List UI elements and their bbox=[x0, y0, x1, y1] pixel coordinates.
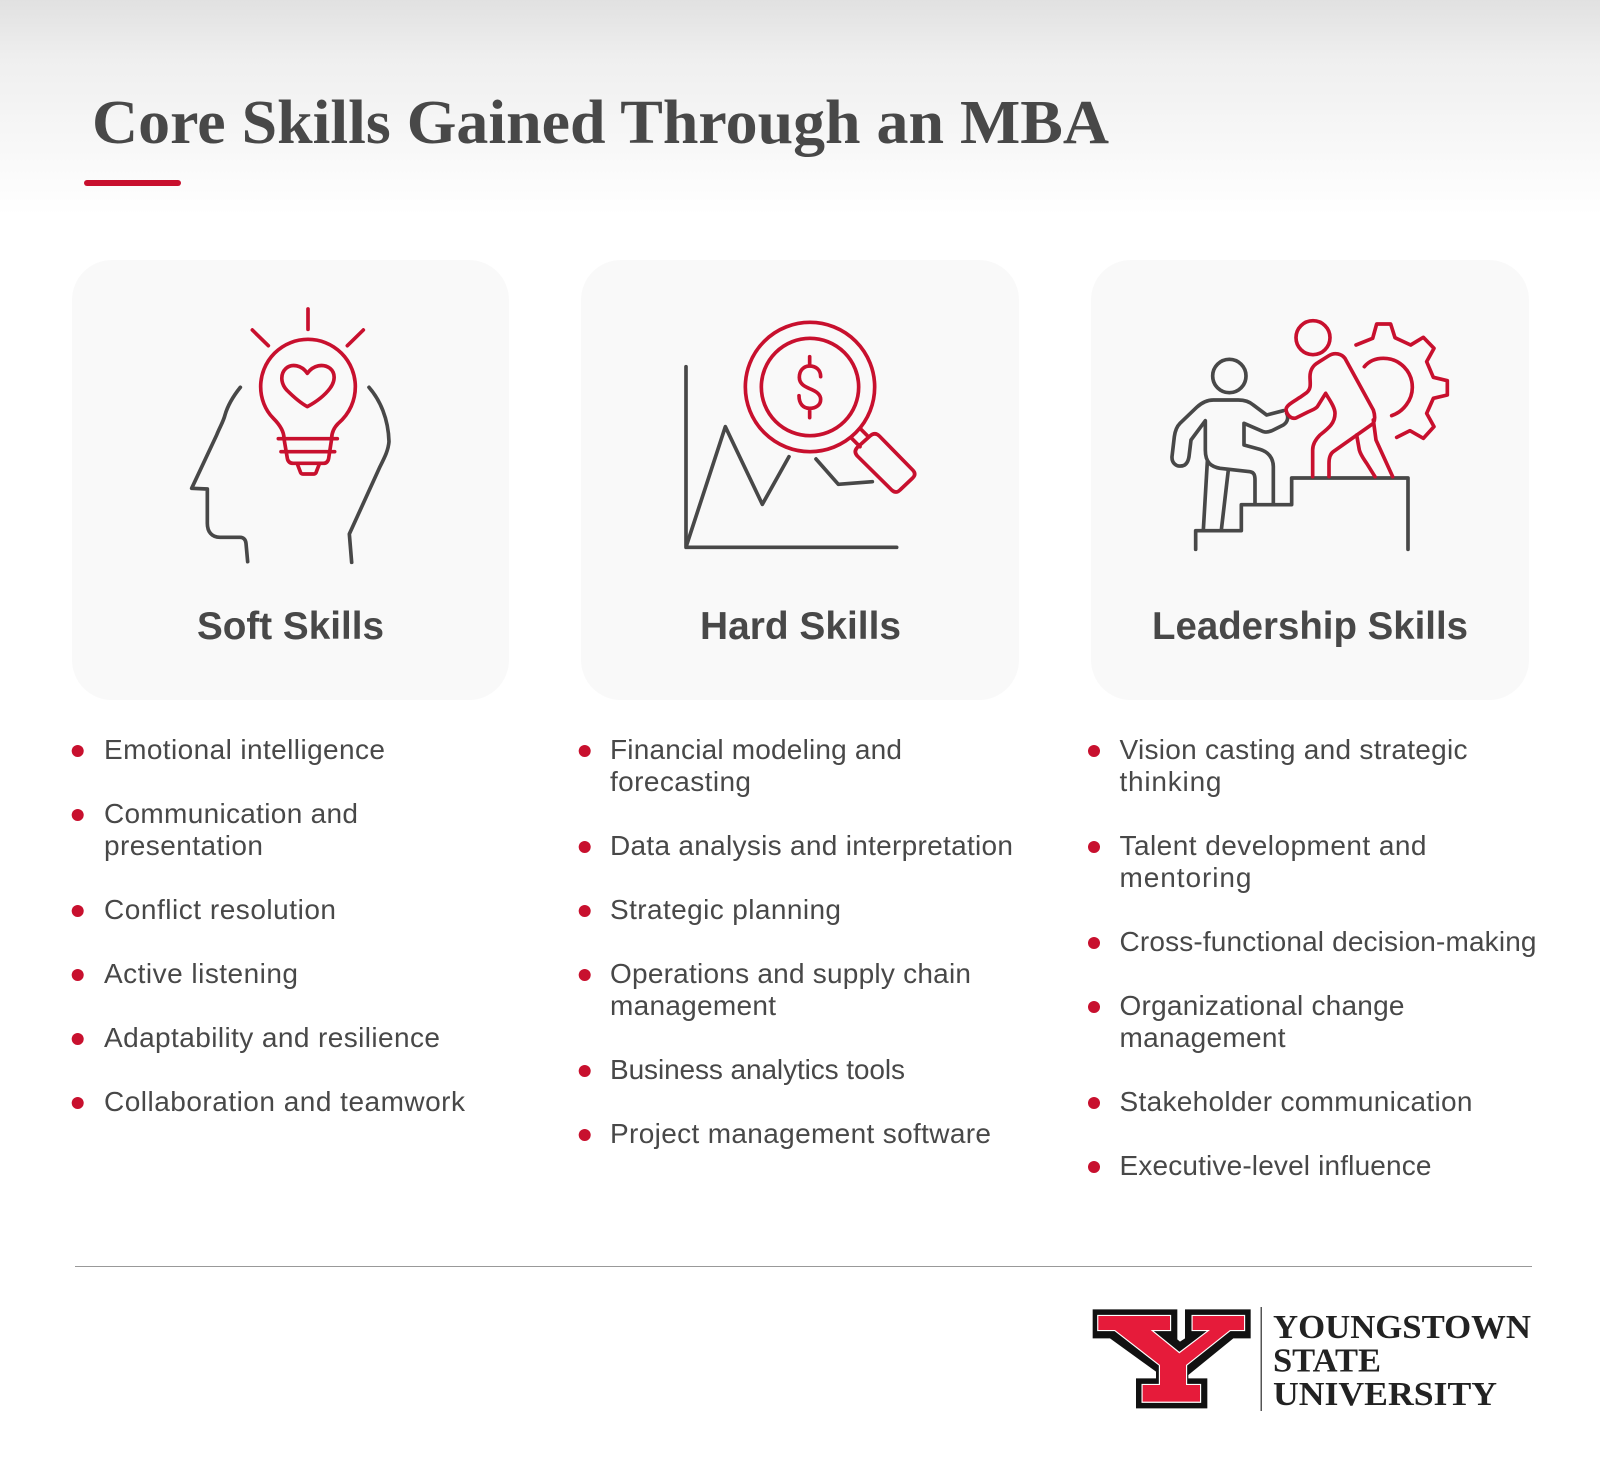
heading: leadership skills: Leadership Skills bbox=[1152, 605, 1468, 648]
list: soft skills: Emotional intelligence bbox=[104, 734, 385, 765]
list: leadership skills: Executive-level influence bbox=[1120, 1150, 1432, 1181]
list: hard skills: Operations and supply chain bbox=[610, 958, 971, 989]
list: soft skills: Active listening bbox=[104, 958, 298, 989]
list: leadership skills: Stakeholder communication bbox=[1120, 1086, 1472, 1117]
list: leadership skills: Vision casting and strategic bbox=[1120, 734, 1468, 765]
icon: chart with magnifying glass and dollar sign bbox=[686, 322, 915, 547]
list: leadership skills: Organizational change bbox=[1120, 990, 1404, 1021]
logo wordmark: STATE bbox=[1273, 1342, 1381, 1380]
title: Core Skills Gained Through an MBA bbox=[92, 89, 1109, 157]
list: hard skills: management bbox=[610, 990, 776, 1021]
list: leadership skills: thinking bbox=[1120, 766, 1222, 797]
list: leadership skills: Cross-functional decision-making bbox=[1120, 926, 1536, 957]
list: soft skills: Adaptability and resilience bbox=[104, 1022, 440, 1053]
list: leadership skills: management bbox=[1120, 1022, 1286, 1053]
icon: head with light bulb and heart bbox=[192, 309, 389, 562]
logo wordmark bbox=[1273, 1309, 1531, 1413]
heading: soft skills: Soft Skills bbox=[197, 605, 384, 648]
icon: leader helping person up stairs with gear bbox=[1172, 321, 1447, 549]
list: hard skills: Data analysis and interpretation bbox=[610, 830, 1013, 861]
list: hard skills: forecasting bbox=[610, 766, 751, 797]
list: soft skills: Collaboration and teamwork bbox=[104, 1086, 466, 1117]
list: hard skills: Strategic planning bbox=[610, 894, 841, 925]
panel: soft skills bbox=[72, 260, 509, 700]
list: soft skills: Communication and bbox=[104, 798, 358, 829]
list: soft skills bbox=[72, 734, 466, 1117]
list: hard skills: Project management software bbox=[610, 1118, 991, 1149]
logo mark: block Y bbox=[1093, 1309, 1251, 1408]
logo wordmark: UNIVERSITY bbox=[1273, 1376, 1497, 1413]
panel: leadership skills bbox=[1091, 260, 1529, 700]
logo: Youngstown State University bbox=[1093, 1307, 1531, 1413]
list: leadership skills: mentoring bbox=[1120, 862, 1252, 893]
panel: hard skills bbox=[581, 260, 1019, 700]
list: leadership skills bbox=[1088, 734, 1536, 1181]
list: soft skills: presentation bbox=[104, 830, 263, 861]
logo wordmark: YOUNGSTOWN bbox=[1273, 1309, 1531, 1346]
list: hard skills: Financial modeling and bbox=[610, 734, 902, 765]
heading: hard skills: Hard Skills bbox=[700, 605, 901, 648]
list: soft skills: Conflict resolution bbox=[104, 894, 336, 925]
list: leadership skills: Talent development and bbox=[1120, 830, 1426, 861]
title accent bar bbox=[84, 180, 181, 186]
list: hard skills bbox=[579, 734, 1013, 1149]
list: hard skills: Business analytics tools bbox=[610, 1054, 905, 1085]
